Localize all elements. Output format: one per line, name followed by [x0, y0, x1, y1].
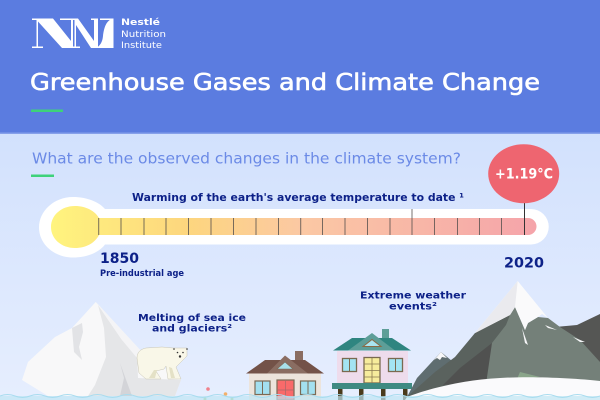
water	[0, 394, 600, 400]
green patch	[517, 372, 540, 379]
back ridge	[540, 314, 600, 385]
main left slope	[407, 313, 512, 397]
subheading: What are the observed changes in the climate system?	[32, 150, 461, 168]
main face	[486, 307, 600, 384]
label pre-industrial age: Pre-industrial age	[100, 269, 184, 279]
logo	[32, 17, 166, 51]
background	[0, 133, 600, 400]
subheading underline	[31, 174, 54, 177]
caption: extreme weather: Extreme weather	[360, 290, 466, 302]
logo: Institute	[121, 41, 162, 51]
snow hill	[405, 377, 600, 400]
logo: Nestlé	[121, 17, 160, 28]
header band	[0, 0, 600, 134]
logo: Nutrition	[121, 30, 166, 40]
thermometer ticks	[99, 209, 501, 235]
snow cap	[475, 281, 548, 333]
house on stilts	[332, 329, 412, 400]
title: Greenhouse Gases and Climate Change	[30, 70, 540, 96]
2020 marker line	[524, 200, 526, 235]
flowers	[204, 387, 234, 400]
label 1850: 1850	[100, 251, 139, 267]
iceberg	[22, 302, 181, 396]
small peak	[407, 352, 470, 397]
thermometer fill	[51, 206, 536, 248]
title underline	[31, 110, 63, 112]
thermometer caption: Warming of the earth's average temperature to date ¹	[132, 192, 464, 204]
caption: melting of sea ice: and glaciers²	[152, 324, 232, 334]
caption: melting of sea ice: Melting of sea ice	[138, 313, 246, 324]
temperature badge	[488, 144, 559, 203]
snow streaks	[522, 328, 528, 345]
thermometer casing	[39, 197, 549, 258]
temperature badge: +1.19°C	[495, 166, 553, 182]
label 2020: 2020	[504, 256, 544, 272]
house left	[246, 351, 324, 400]
icon: polar bear	[137, 347, 188, 379]
caption: extreme weather: events²	[389, 302, 437, 312]
mountains	[405, 281, 600, 400]
thermometer	[39, 197, 549, 258]
